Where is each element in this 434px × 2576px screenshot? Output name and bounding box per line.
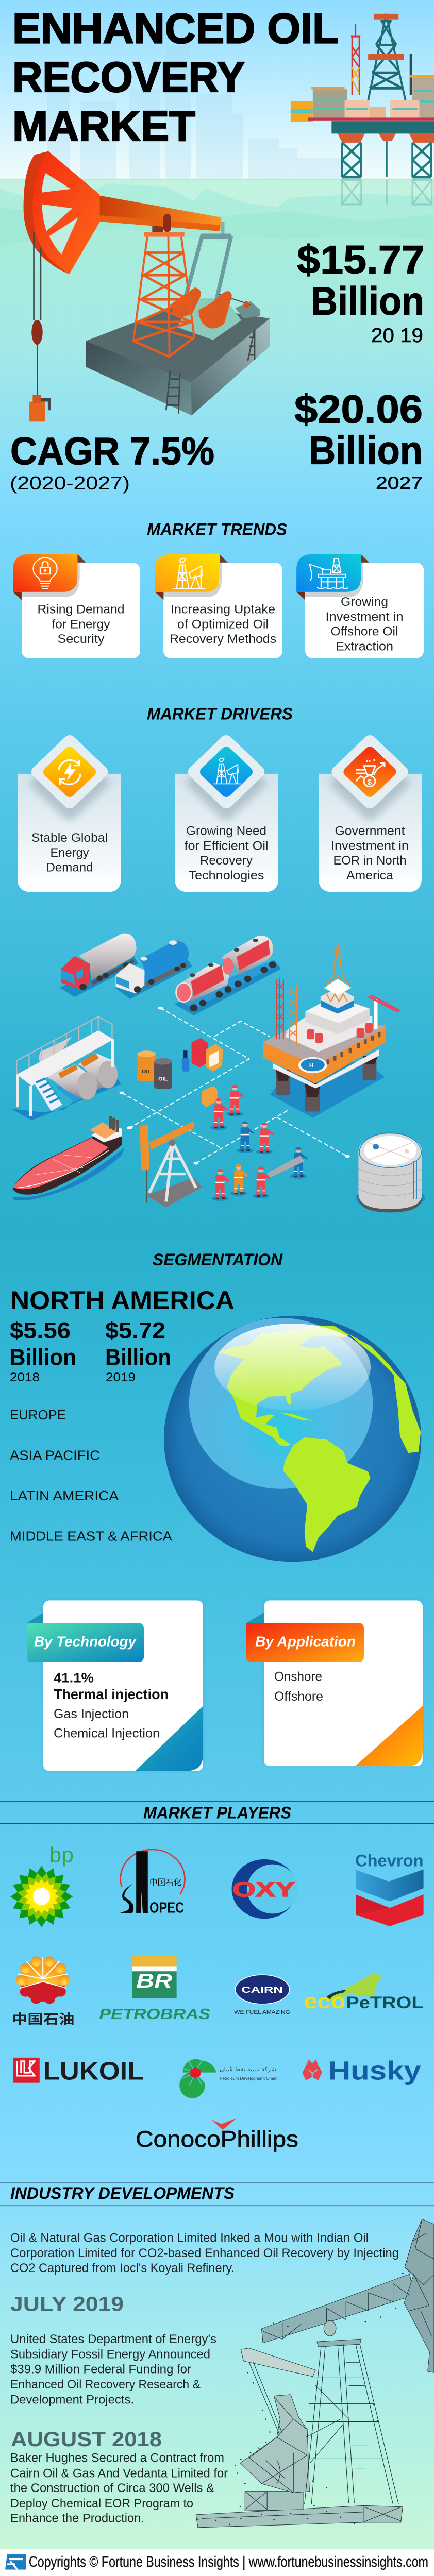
icon: small pump jack — [140, 1121, 202, 1208]
north america figures: $5.72 — [105, 1318, 165, 1343]
panel: by application — [246, 1600, 423, 1766]
icon: offshore platform: H — [309, 1063, 313, 1069]
development: July 2019: $39.9 Million Federal Funding for — [10, 2363, 191, 2376]
north america figures: $5.56 — [10, 1318, 71, 1343]
logo: ecopetrol: PeTROL — [346, 1994, 424, 2012]
logo: chevron: Chevron — [355, 1852, 424, 1870]
logo: oxy: OXY — [232, 1878, 295, 1902]
offshore oil rig illustration — [291, 14, 434, 204]
north america figures: Billion — [10, 1344, 76, 1370]
development: July 2019 — [10, 2292, 216, 2407]
panel: by technology: Chemical Injection — [54, 1726, 160, 1740]
logo: sinopec: 中国石化 — [149, 1878, 181, 1887]
icon: silver fuel truck — [59, 934, 138, 997]
market size 2027: Billion — [309, 428, 423, 472]
logo: bp — [10, 1843, 74, 1927]
development: August 2018: AUGUST 2018 — [11, 2428, 162, 2451]
panel: by technology — [27, 1600, 203, 1771]
logo: sinopec — [120, 1850, 185, 1916]
card: offshore investment: Growing — [341, 596, 388, 609]
hero scene: sky, skyline, sea — [0, 0, 434, 246]
logo: cairn: WE FUEL AMAZING — [234, 2009, 290, 2015]
market size 2019 — [297, 238, 425, 347]
card: offshore investment: Investment in — [326, 610, 404, 624]
card: offshore investment — [296, 554, 424, 658]
market size 2019: Billion — [311, 279, 424, 324]
icon: tanker trailers — [174, 936, 281, 1015]
isometric oil and gas supply chain illustration — [10, 934, 425, 1212]
north america figures: 2019 — [106, 1370, 136, 1384]
card: government investment: Government — [335, 824, 405, 838]
development: August 2018: Baker Hughes Secured a Contract from — [10, 2451, 224, 2465]
logo: ecopetrol — [304, 1974, 424, 2013]
logo: cairn: CAIRN — [241, 1985, 283, 1995]
logo: petroleum development oman: شركة تنمية نفط عُمان — [220, 2066, 276, 2073]
CAGR: (2020-2027) — [10, 472, 130, 494]
panel: by technology: Gas Injection — [54, 1707, 129, 1721]
title: RECOVERY — [12, 54, 245, 101]
logo: chevron — [355, 1852, 424, 1926]
logo: cnpc — [12, 1956, 74, 2027]
panel: market drivers cards — [18, 733, 422, 892]
logo: petrobras — [99, 1956, 210, 2023]
market size 2027: $20.06 — [294, 387, 423, 432]
logo: conocophillips: ConocoPhillips — [136, 2126, 298, 2152]
logo: petroleum development oman — [179, 2059, 278, 2098]
CAGR: CAGR 7.5% — [10, 430, 214, 473]
region list: MIDDLE EAST & AFRICA — [10, 1529, 172, 1544]
logo: petrobras: BR — [136, 1970, 172, 1992]
north america figures: Billion — [105, 1344, 171, 1370]
footer — [0, 2549, 434, 2576]
card: stable global energy demand: Demand — [46, 861, 93, 874]
card: government investment: America — [346, 869, 393, 883]
card: government investment — [319, 733, 422, 892]
card: efficient recovery technologies: Recovery — [200, 854, 253, 868]
logo: lukoil: LUKOIL — [43, 2057, 144, 2085]
card: rising demand: Security — [57, 633, 105, 646]
panel: by application: Onshore — [274, 1670, 322, 1684]
development: July 2019: Development Projects. — [10, 2393, 134, 2407]
heading: market trends: MARKET TRENDS — [147, 520, 287, 539]
logo: petrobras: PETROBRAS — [99, 2006, 210, 2023]
card: government investment: Investment in — [331, 839, 409, 853]
icon: oil barrels and cans: OIL — [158, 1077, 168, 1082]
card: rising demand: for Energy — [52, 618, 110, 631]
icon: control box and workers — [202, 1085, 308, 1201]
market size 2027: 2027 — [376, 473, 423, 493]
heading: industry developments: INDUSTRY DEVELOPMENTS — [10, 2184, 235, 2203]
card: rising demand — [13, 554, 140, 658]
icon: storage tanks with gantry — [10, 1016, 121, 1121]
card: stable global energy demand: Energy — [51, 846, 89, 860]
development text: ONGC MoU: CO2 Captured from Iocl's Koyali Refinery. — [10, 2261, 235, 2275]
card: rising demand: Rising Demand — [37, 603, 125, 616]
logo: ecopetrol: eco — [304, 1990, 345, 2013]
heading: segmentation: SEGMENTATION — [153, 1251, 283, 1269]
logo: husky: Husky — [328, 2057, 421, 2086]
card: government investment: $ — [368, 778, 372, 787]
title: MARKET — [12, 103, 195, 150]
development: July 2019: JULY 2019 — [10, 2292, 124, 2315]
globe illustration — [164, 1316, 421, 1562]
card: optimized recovery methods: of Optimized Oil — [177, 618, 269, 631]
panel: by technology: 41.1% — [54, 1670, 94, 1685]
card: efficient recovery technologies: for Efficient Oil — [185, 839, 269, 853]
card: optimized recovery methods: Recovery Methods — [170, 633, 276, 646]
region list: LATIN AMERICA — [10, 1488, 119, 1503]
wireframe pump jack illustration — [196, 2219, 434, 2528]
development: August 2018: Deploy Chemical EOR Program to — [10, 2497, 193, 2511]
market size 2027 — [294, 387, 423, 493]
card: offshore investment: Offshore Oil — [331, 625, 398, 639]
panel: by technology: Thermal injection — [54, 1686, 169, 1703]
logo: oxy — [231, 1859, 298, 1919]
development: July 2019: Enhanced Oil Recovery Research & — [10, 2378, 201, 2392]
card: stable global energy demand — [18, 733, 121, 892]
icon: offshore platform — [263, 942, 399, 1118]
logo: petroleum development oman: Petroleum Development Oman — [220, 2076, 278, 2081]
card: offshore investment: Extraction — [336, 640, 393, 653]
pump jack illustration — [24, 151, 270, 421]
development: July 2019: United States Department of Energy's — [10, 2332, 216, 2346]
north america figures — [10, 1286, 235, 1384]
title — [12, 5, 339, 150]
icon: blue fuel truck — [115, 940, 192, 999]
logo: sinopec: OPEC — [149, 1900, 184, 1916]
development: July 2019: Subsidiary Fossil Energy Announced — [10, 2348, 210, 2361]
logo: bp: bp — [49, 1843, 74, 1867]
panel: by technology: By Technology — [34, 1634, 137, 1650]
region list: EUROPE — [10, 1407, 66, 1422]
CAGR — [10, 430, 214, 494]
heading: market drivers: MARKET DRIVERS — [147, 705, 293, 723]
logo: cairn — [234, 1975, 290, 2015]
card: efficient recovery technologies: Technologies — [189, 869, 264, 883]
logo: cnpc: 中国石油 — [12, 2012, 74, 2027]
development: August 2018: the Construction of Circa 300 Wells & — [10, 2482, 214, 2495]
panel: by application: Offshore — [274, 1689, 323, 1704]
icon: oil tanker ship — [12, 1116, 125, 1200]
card: optimized recovery methods — [155, 554, 282, 658]
north america figures: NORTH AMERICA — [10, 1286, 235, 1315]
development: August 2018 — [10, 2428, 228, 2525]
market size 2019: $15.77 — [297, 238, 425, 282]
panel: market trends cards — [13, 554, 424, 658]
icon: oil barrels and cans — [137, 1038, 223, 1089]
panel: company logos — [10, 1843, 424, 2152]
card: efficient recovery technologies — [175, 733, 278, 892]
region list: ASIA PACIFIC — [10, 1448, 100, 1463]
region list — [10, 1407, 172, 1544]
card: stable global energy demand: Stable Global — [31, 832, 108, 845]
development text: ONGC MoU: Corporation Limited for CO2-based Enhanced Oil Recovery by Injecting — [10, 2247, 399, 2260]
development: August 2018: Enhance the Production. — [10, 2512, 144, 2525]
dashed connectors — [119, 1007, 350, 1165]
heading: market players: MARKET PLAYERS — [143, 1804, 291, 1823]
development text: ONGC MoU: Oil & Natural Gas Corporation Limited Inked a Mou with Indian Oil — [10, 2231, 369, 2245]
title: ENHANCED OIL — [12, 5, 339, 52]
development: August 2018: Cairn Oil & Gas And Vedanta Limited for — [10, 2467, 228, 2480]
icon: oil barrels and cans: OIL — [142, 1070, 151, 1075]
development text: ONGC MoU — [10, 2231, 399, 2275]
panel: by application: By Application — [255, 1634, 356, 1650]
card: efficient recovery technologies: Growing Need — [186, 824, 266, 838]
card: government investment: EOR in North — [333, 854, 406, 868]
north america figures: 2018 — [10, 1370, 40, 1384]
market size 2019: 20 19 — [371, 324, 423, 347]
icon: storage tank — [356, 1133, 425, 1212]
card: optimized recovery methods: Increasing Uptake — [171, 603, 275, 616]
